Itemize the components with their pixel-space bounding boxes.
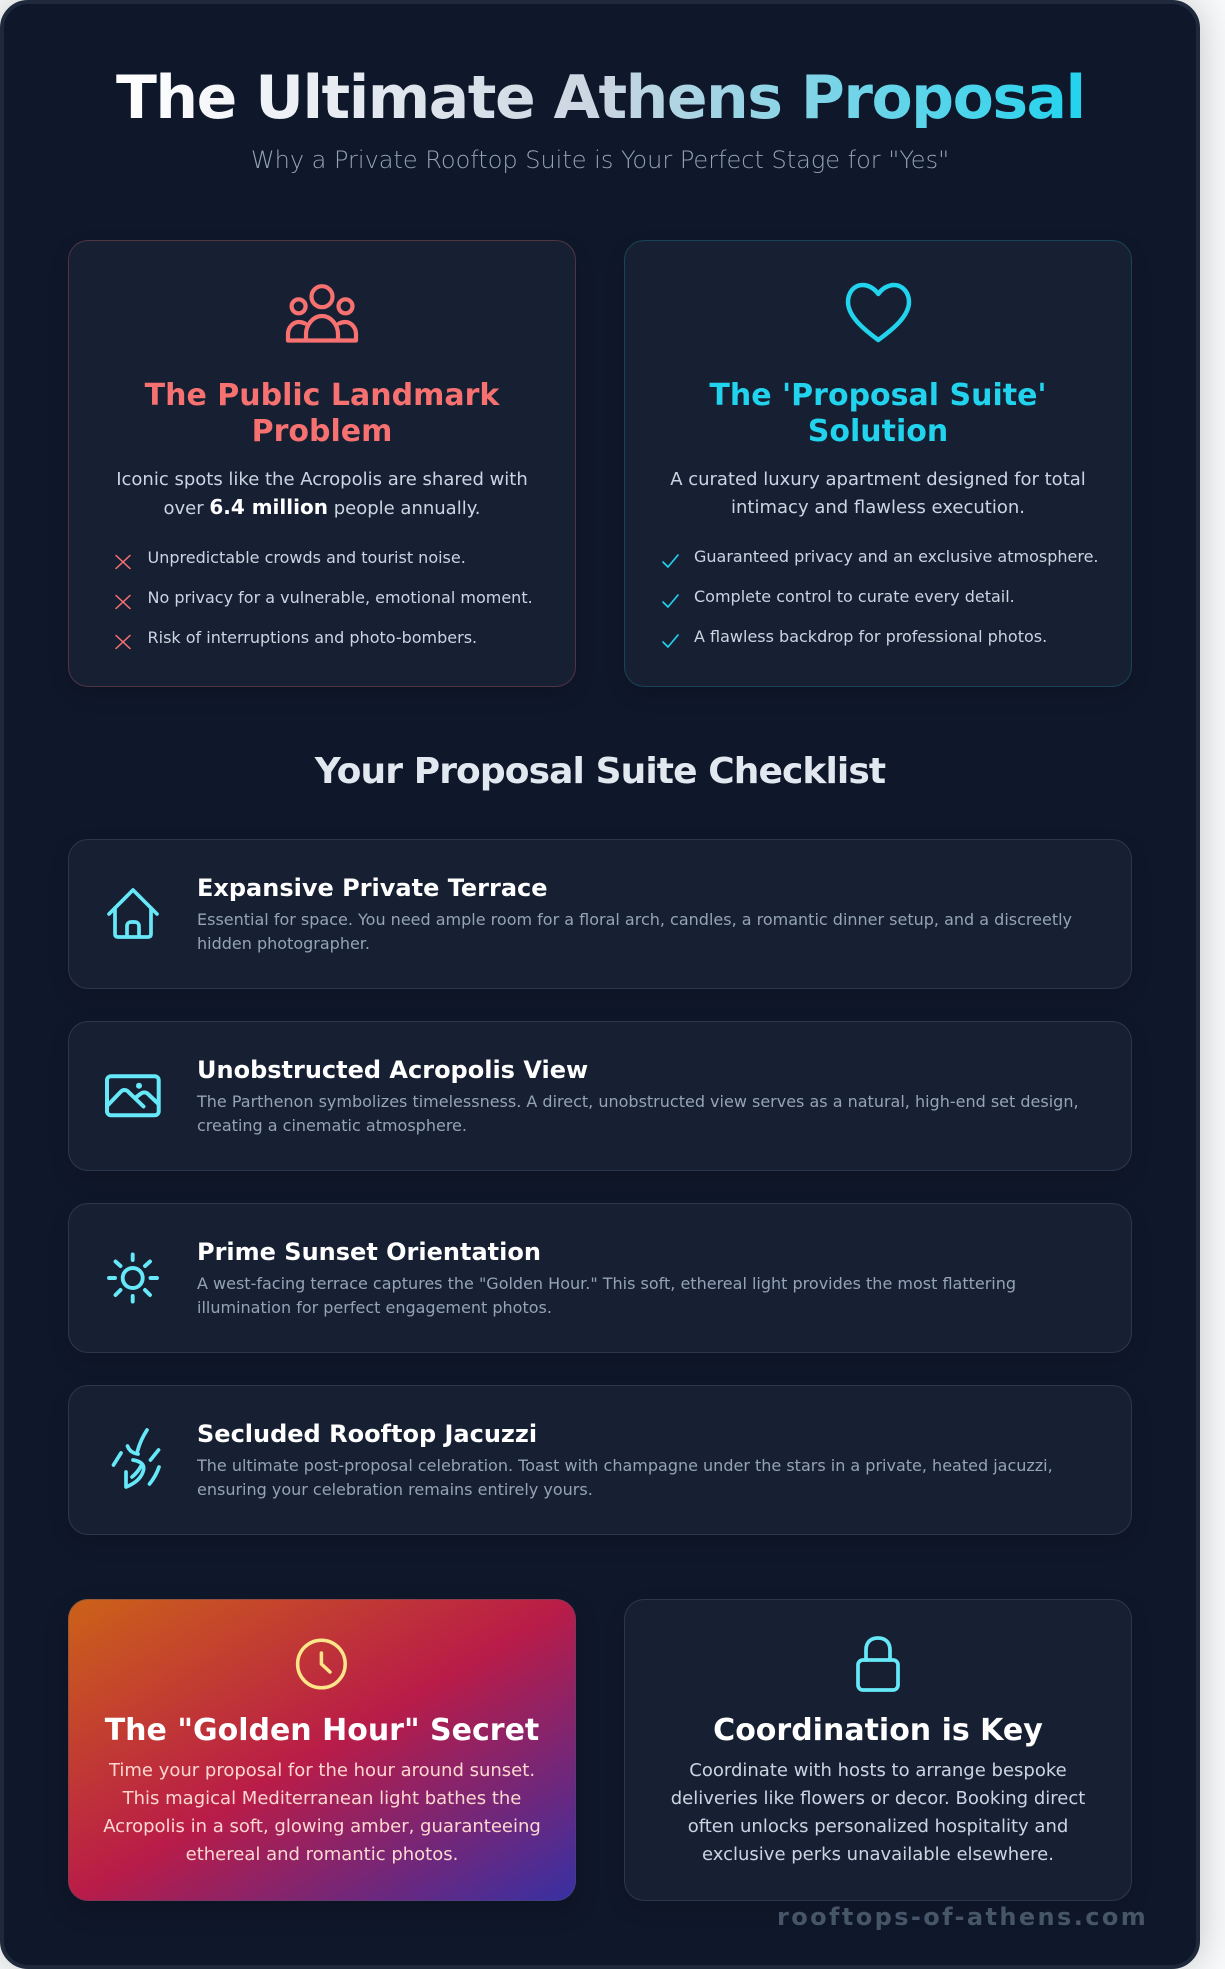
card description: A west-facing terrace captures the "Golden Hour." This soft, ethereal light provides the most flattering [197, 1274, 1016, 1293]
heading: Coordination is Key [713, 1713, 1043, 1748]
panel: the proposal suite solution [624, 240, 1132, 687]
list item: Unpredictable crowds and tourist noise. [148, 548, 466, 567]
text block: Iconic spots like the Acropolis are shared with [116, 469, 528, 490]
title: The Ultimate Athens Proposal [116, 63, 1085, 133]
text block: Coordinate with hosts to arrange bespoke [689, 1760, 1067, 1781]
heading: Solution [808, 414, 948, 449]
icon: cross [115, 554, 131, 570]
icon: check [662, 634, 679, 648]
panel: secluded rooftop jacuzzi [68, 1385, 1132, 1535]
panel: unobstructed acropolis view [68, 1021, 1132, 1171]
list: benefits [662, 547, 1098, 648]
text block: deliveries like flowers or decor. Booking direct [671, 1788, 1085, 1809]
icon: padlock [856, 1636, 900, 1692]
subtitle: Why a Private Rooftop Suite is Your Perfect Stage for "Yes" [251, 146, 949, 174]
panel: expansive private terrace [68, 839, 1132, 989]
panel: the public landmark problem [68, 240, 576, 687]
icon: landscape image [105, 1074, 161, 1118]
icon: clock [296, 1638, 347, 1690]
card description: creating a cinematic atmosphere. [197, 1116, 467, 1135]
text block: often unlocks personalized hospitality and [688, 1816, 1068, 1837]
card title: Prime Sunset Orientation [197, 1238, 541, 1266]
text block [671, 1760, 1085, 1865]
card description [197, 1274, 1016, 1317]
card description [197, 910, 1072, 953]
text block: Time your proposal for the hour around sunset. [109, 1760, 535, 1781]
list: drawbacks [115, 548, 533, 650]
card description [196, 1456, 1053, 1499]
text block [670, 469, 1086, 518]
heading: The 'Proposal Suite' [709, 378, 1047, 413]
list item: No privacy for a vulnerable, emotional moment. [148, 588, 533, 607]
list item: Risk of interruptions and photo-bombers. [148, 628, 477, 647]
list item: Guaranteed privacy and an exclusive atmosphere. [694, 547, 1098, 566]
panel: the golden hour secret [68, 1599, 576, 1901]
text block: over 6.4 million people annually. [163, 495, 481, 519]
icon: cross [115, 594, 131, 610]
panel: prime sunset orientation [68, 1203, 1132, 1353]
icon: heart [846, 282, 912, 342]
watermark: rooftops-of-athens.com [777, 1903, 1148, 1931]
card description [196, 1092, 1079, 1135]
card description: The Parthenon symbolizes timelessness. A direct, unobstructed view serves as a natural, high-end set design, [197, 1092, 1079, 1111]
text block: This magical Mediterranean light bathes the [123, 1788, 521, 1809]
card description: The ultimate post-proposal celebration. Toast with champagne under the stars in a private, heated jacuzzi, [197, 1456, 1053, 1475]
text block: exclusive perks unavailable elsewhere. [702, 1844, 1054, 1865]
heading [144, 378, 500, 449]
icon: house [107, 888, 159, 939]
icon: check [662, 554, 679, 568]
panel: coordination is key [624, 1599, 1132, 1901]
card title: Unobstructed Acropolis View [197, 1056, 588, 1084]
list item: Complete control to curate every detail. [694, 587, 1015, 606]
heading: The "Golden Hour" Secret [105, 1713, 539, 1748]
icon: sun [107, 1252, 159, 1304]
section heading: Your Proposal Suite Checklist [315, 751, 885, 792]
card description: Essential for space. You need ample room for a floral arch, candles, a romantic dinner setup, and a discreetly [197, 910, 1072, 929]
heading: Problem [252, 414, 392, 449]
list item: A flawless backdrop for professional photos. [694, 627, 1047, 646]
icon: group of people [286, 284, 358, 343]
heading [709, 378, 1047, 449]
icon: jacuzzi bubbles [112, 1428, 161, 1489]
text block: A curated luxury apartment designed for total [670, 469, 1086, 490]
card description: illumination for perfect engagement photos. [197, 1298, 552, 1317]
card description: ensuring your celebration remains entirely yours. [197, 1480, 593, 1499]
icon: cross [115, 634, 131, 650]
text block [116, 469, 528, 519]
card title: Expansive Private Terrace [197, 874, 548, 902]
text block: intimacy and flawless execution. [731, 497, 1025, 518]
text block: ethereal and romantic photos. [186, 1844, 458, 1865]
card title: Secluded Rooftop Jacuzzi [197, 1420, 537, 1448]
card description: hidden photographer. [197, 934, 370, 953]
text block [103, 1760, 541, 1865]
text block: Acropolis in a soft, glowing amber, guaranteeing [103, 1816, 541, 1837]
heading: The Public Landmark [145, 378, 499, 413]
icon: check [662, 594, 679, 608]
